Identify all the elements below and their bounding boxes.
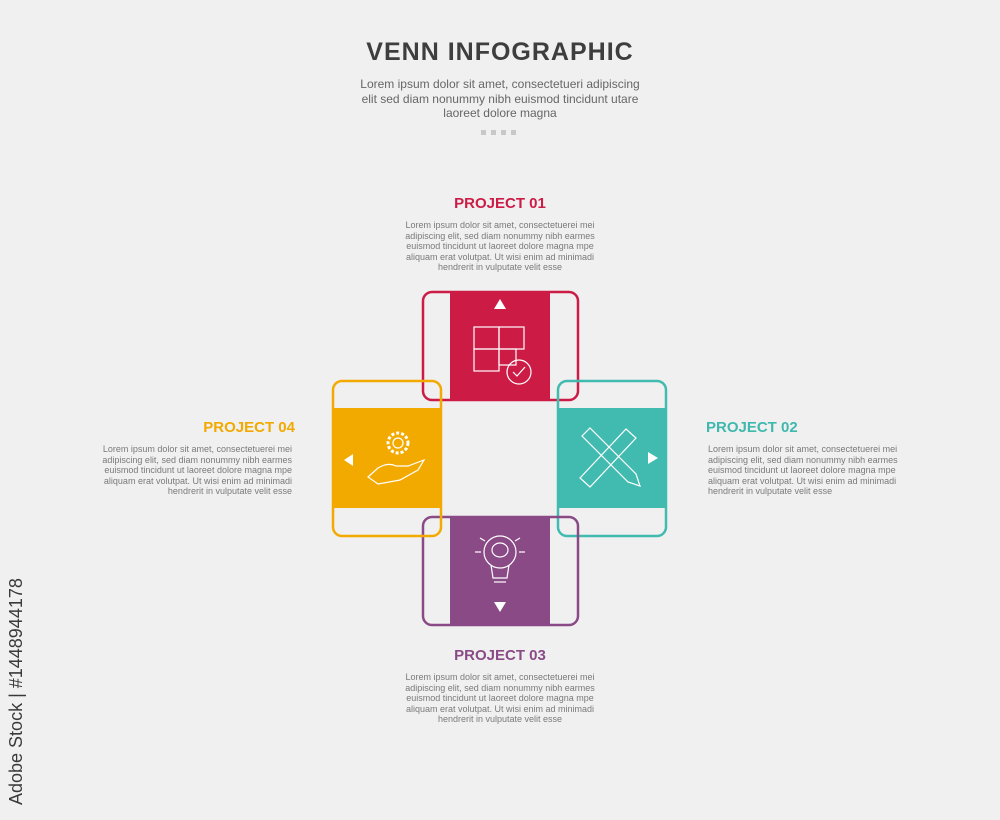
icon: ruler pencil	[580, 428, 640, 487]
project 02 text: Lorem ipsum dolor sit amet, consectetuerei mei adipiscing elit, sed diam nonummy nibh earmes euismod tincidunt ut laoreet dolore magna mpe aliquam erat volutpat. Ut wisi enim ad minimadi hendrerit in vulputate velit esse	[708, 444, 898, 496]
box 01	[423, 292, 578, 400]
box 02	[558, 381, 666, 536]
box 03	[423, 517, 578, 625]
project 03 text: Lorem ipsum dolor sit amet, consectetuerei mei adipiscing elit, sed diam nonummy nibh earmes euismod tincidunt ut laoreet dolore magna mpe aliquam erat volutpat. Ut wisi enim ad minimadi hendrerit in vulputate velit esse	[405, 672, 595, 724]
icon: puzzle	[474, 327, 531, 384]
watermark id: Adobe Stock | #1448944178	[6, 578, 26, 805]
icon: hand gear	[368, 433, 424, 484]
box 04	[333, 381, 441, 536]
project 02 heading: PROJECT 02	[706, 419, 798, 436]
dots	[481, 130, 521, 135]
subtitle: Lorem ipsum dolor sit amet, consectetueri adipiscing elit sed diam nonummy nibh euismod tincidunt utare laoreet dolore magna	[360, 77, 640, 120]
icon: bulb	[475, 536, 525, 582]
project 01 heading: PROJECT 01	[454, 195, 546, 212]
title: VENN INFOGRAPHIC	[366, 38, 634, 66]
project 04 heading: PROJECT 04	[203, 419, 295, 436]
project 04 text: Lorem ipsum dolor sit amet, consectetuerei mei adipiscing elit, sed diam nonummy nibh earmes euismod tincidunt ut laoreet dolore magna mpe aliquam erat volutpat. Ut wisi enim ad minimadi hendrerit in vulputate velit esse	[102, 444, 292, 496]
project 03 heading: PROJECT 03	[454, 647, 546, 664]
project 01 text: Lorem ipsum dolor sit amet, consectetuerei mei adipiscing elit, sed diam nonummy nibh earmes euismod tincidunt ut laoreet dolore magna mpe aliquam erat volutpat. Ut wisi enim ad minimadi hendrerit in vulputate velit esse	[405, 220, 595, 272]
